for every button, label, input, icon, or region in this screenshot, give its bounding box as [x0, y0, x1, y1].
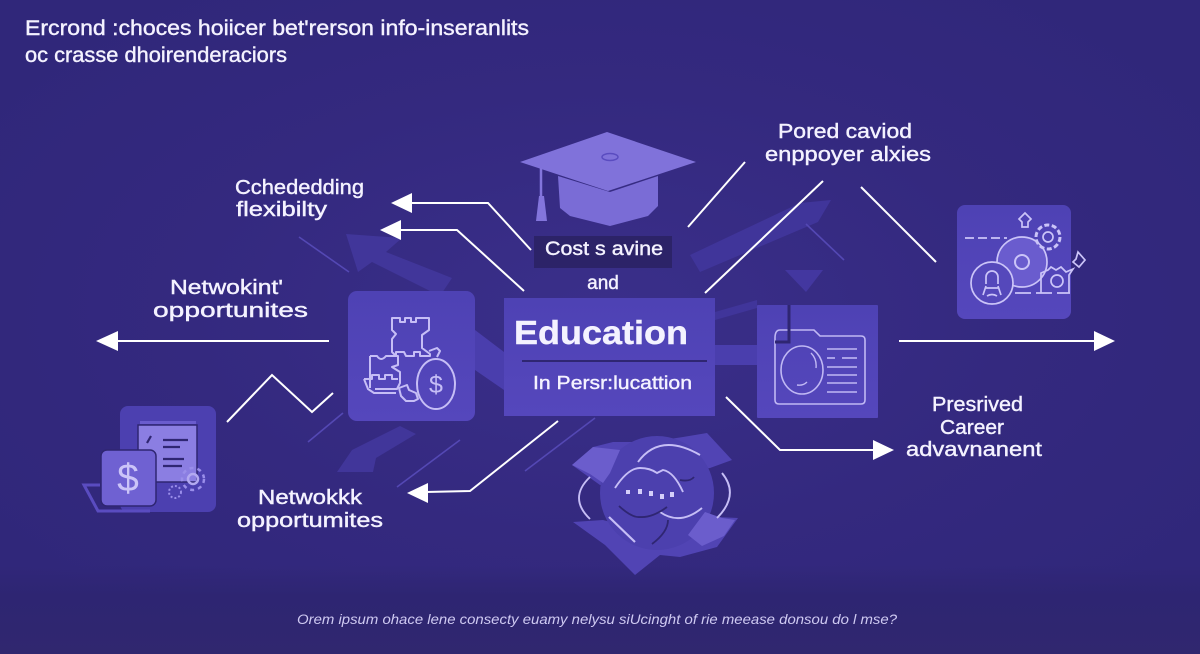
panel: folder icon: [757, 305, 878, 418]
title: [25, 17, 529, 67]
label: and: and: [587, 273, 619, 294]
label: perceived employer value: enppoyer alxies: [765, 144, 931, 166]
panel: castle and money icon: $: [429, 371, 443, 399]
label: networking opportunities left: [153, 277, 308, 322]
panel: gears and person icon: [957, 205, 1085, 319]
background faded arrows: [299, 200, 844, 487]
label: networking opportunities left: Netwokint': [170, 277, 283, 299]
arrow: long right: [899, 331, 1115, 351]
panel: education: Education: [514, 314, 688, 351]
panel: castle and money icon: [348, 291, 475, 421]
icon: circular globe: [572, 433, 738, 575]
label: scheduling flexibility: flexibilty: [236, 199, 327, 221]
panel: finance document icon: [84, 406, 216, 512]
label: scheduling flexibility: Cchededding: [235, 177, 364, 199]
label: networking opportunities bottom: [237, 487, 383, 532]
label: networking opportunities bottom: opportumites: [237, 510, 383, 532]
panel: finance document icon: $: [117, 457, 139, 500]
arrow: lower left: [407, 421, 558, 503]
label: perceived employer value: Pored caviod: [778, 121, 912, 143]
arrow: lower right: [726, 397, 894, 460]
title: oc crasse dhoirenderaciors: [25, 44, 287, 67]
label: networking opportunities left: opportunites: [153, 300, 308, 322]
label: cost saving: Cost s avine: [545, 239, 663, 260]
label: perceived career advancement: Career: [940, 417, 1004, 439]
connector lines to employer label: [688, 162, 936, 293]
label: scheduling flexibility: [235, 177, 364, 221]
label: perceived career advancement: Presrived: [932, 394, 1023, 416]
label: perceived employer value: [765, 121, 931, 166]
arrow: to scheduling flexibility upper: [391, 193, 531, 250]
label: perceived career advancement: [906, 394, 1043, 461]
arrow: long left: [96, 331, 329, 351]
label: perceived career advancement: advavnanent: [906, 439, 1043, 461]
zigzag line: [227, 375, 333, 422]
label: networking opportunities bottom: Netwokkk: [258, 487, 363, 509]
panel: education: [504, 298, 715, 416]
title: Ercrond :choces hoiicer bet'rerson info-inseranlits: [25, 17, 529, 40]
icon: graduation cap: [520, 132, 696, 226]
panel: education: In Persr:lucattion: [533, 373, 692, 393]
label: cost saving: [534, 236, 672, 268]
footer note: Orem ipsum ohace lene consecty euamy nelysu siUcinght of rie meease donsou do l mse?: [297, 611, 897, 627]
arrow: to scheduling flexibility lower: [380, 220, 524, 291]
